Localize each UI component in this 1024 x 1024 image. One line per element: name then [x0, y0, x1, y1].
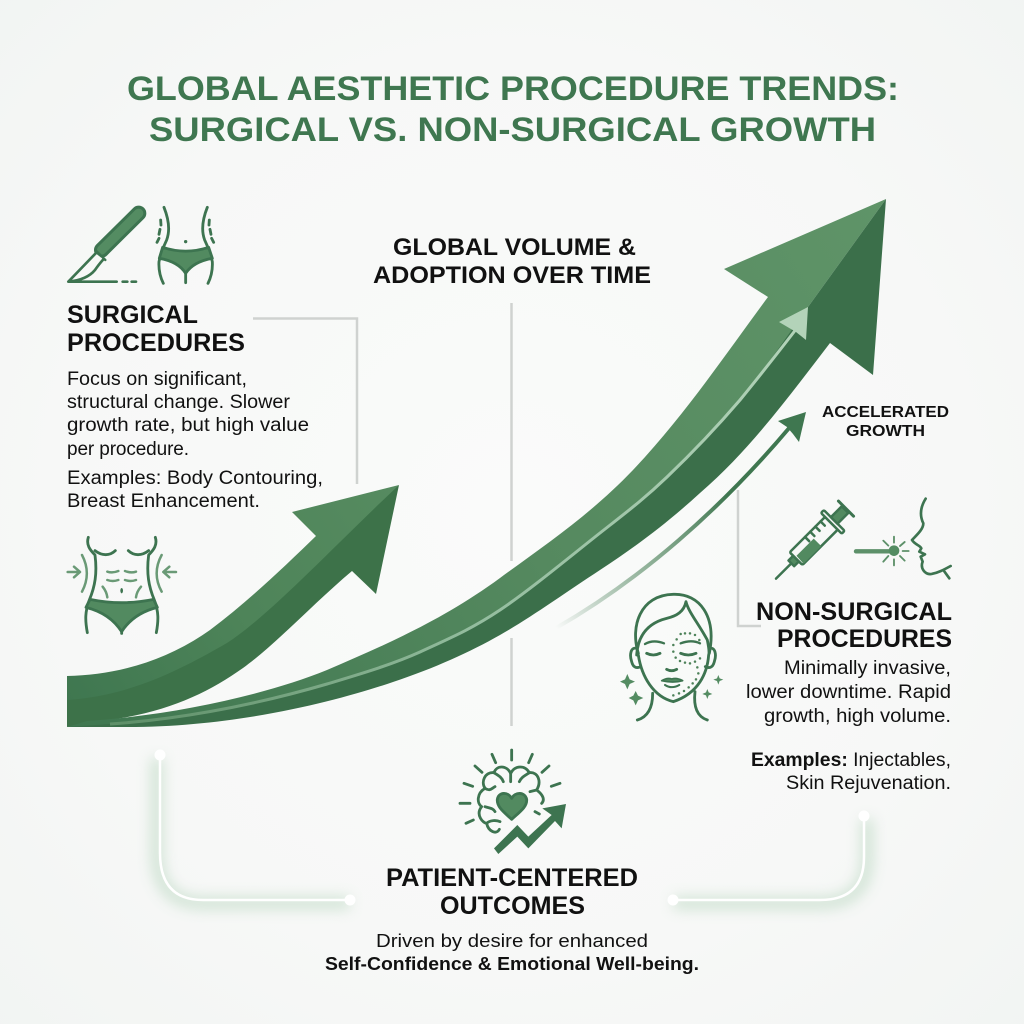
- surgical procedures text: Breast Enhancement.: [67, 491, 260, 512]
- center vertical axis line: [510, 303, 513, 726]
- label: accelerated growth: ACCELERATED: [822, 404, 949, 421]
- glow connector: left: [154, 750, 356, 906]
- patient-centered outcomes text: PATIENT-CENTERED: [386, 864, 638, 892]
- connector: surgical: [253, 318, 357, 484]
- surgical procedures text: [67, 301, 323, 512]
- arrow: accelerated growth: [556, 412, 806, 628]
- title: [127, 70, 899, 149]
- non-surgical procedures text: growth, high volume.: [764, 706, 951, 727]
- glow connector: right: [668, 810, 870, 906]
- arrow: surgical growth: [67, 485, 399, 727]
- title: GLOBAL AESTHETIC PROCEDURE TRENDS:: [127, 70, 899, 108]
- non-surgical procedures text: Minimally invasive,: [784, 658, 951, 679]
- non-surgical procedures text: lower downtime. Rapid: [746, 682, 951, 703]
- surgical procedures text: PROCEDURES: [67, 329, 245, 357]
- surgical procedures text: Focus on significant,: [67, 369, 247, 390]
- icon: laser and face profile: [856, 499, 951, 578]
- icon: brain, heart and growth arrow: [460, 750, 566, 854]
- heading: global volume and adoption over time: GLOBAL VOLUME &: [393, 234, 636, 261]
- heading: global volume and adoption over time: [373, 234, 651, 289]
- non-surgical procedures text: PROCEDURES: [777, 625, 952, 653]
- icon: syringe: [766, 498, 856, 589]
- surgical procedures text: Examples: Body Contouring,: [67, 468, 323, 489]
- patient-centered outcomes text: [325, 864, 699, 974]
- icon: waist: [157, 207, 214, 283]
- icon: torso with abs: [68, 537, 176, 633]
- patient-centered outcomes text: Driven by desire for enhanced: [376, 931, 648, 951]
- non-surgical procedures text: NON-SURGICAL: [756, 598, 952, 626]
- heading: global volume and adoption over time: ADOPTION OVER TIME: [373, 262, 651, 289]
- title: SURGICAL VS. NON-SURGICAL GROWTH: [149, 111, 876, 149]
- surgical procedures text: structural change. Slower: [67, 392, 291, 413]
- surgical procedures text: per procedure.: [67, 439, 189, 460]
- label: accelerated growth: GROWTH: [846, 423, 925, 440]
- label: accelerated growth: [822, 404, 949, 440]
- patient-centered outcomes text: OUTCOMES: [440, 892, 585, 920]
- non-surgical procedures text: Examples: Injectables,: [751, 750, 951, 771]
- arrow highlight: [110, 307, 808, 724]
- patient-centered outcomes text: Self-Confidence & Emotional Well-being.: [325, 954, 699, 974]
- arrow: non-surgical growth: [67, 199, 886, 727]
- non-surgical procedures text: [746, 598, 952, 794]
- surgical procedures text: SURGICAL: [67, 301, 198, 329]
- surgical procedures text: growth rate, but high value: [67, 415, 309, 436]
- connector: non-surgical: [738, 490, 761, 626]
- non-surgical procedures text: Skin Rejuvenation.: [786, 773, 951, 794]
- icon: face with sparkles: [620, 594, 723, 720]
- icon: scalpel: [68, 213, 139, 282]
